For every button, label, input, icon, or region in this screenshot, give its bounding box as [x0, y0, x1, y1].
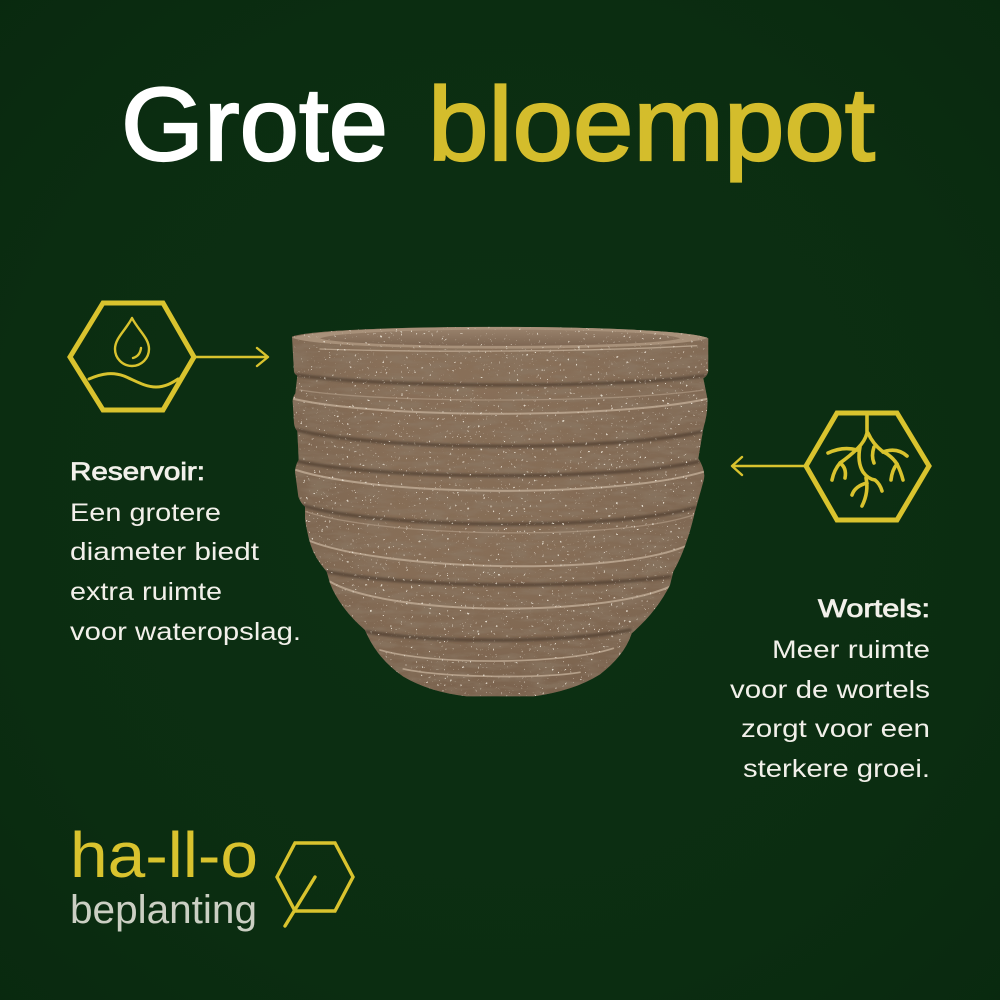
text block: reservoir: Reservoir:	[70, 458, 205, 486]
text block: wortels: voor de wortels	[730, 676, 930, 704]
title	[121, 67, 875, 183]
text block: wortels: sterkere groei.	[743, 755, 930, 783]
text block: reservoir: extra ruimte	[70, 578, 222, 606]
logo: ha-ll-o beplanting	[70, 819, 353, 932]
flower pot	[292, 326, 708, 696]
text block: wortels: Meer ruimte	[772, 636, 930, 664]
text block: reservoir: Een grotere	[70, 499, 221, 527]
text block: reservoir: diameter biedt	[70, 538, 259, 566]
text block: wortels	[730, 595, 930, 783]
logo: ha-ll-o beplanting: ha-ll-o	[70, 819, 258, 891]
text block: reservoir: voor wateropslag.	[70, 618, 301, 646]
title: bloempot	[428, 67, 875, 183]
text block: wortels: zorgt voor een	[741, 715, 930, 743]
logo: ha-ll-o beplanting: beplanting	[70, 888, 257, 932]
icon: roots hexagon with arrow	[732, 413, 929, 520]
text block: reservoir	[70, 458, 301, 646]
title: Grote	[121, 67, 388, 183]
icon: reservoir hexagon with water drop and arrow	[70, 303, 268, 410]
text block: wortels: Wortels:	[818, 595, 930, 623]
